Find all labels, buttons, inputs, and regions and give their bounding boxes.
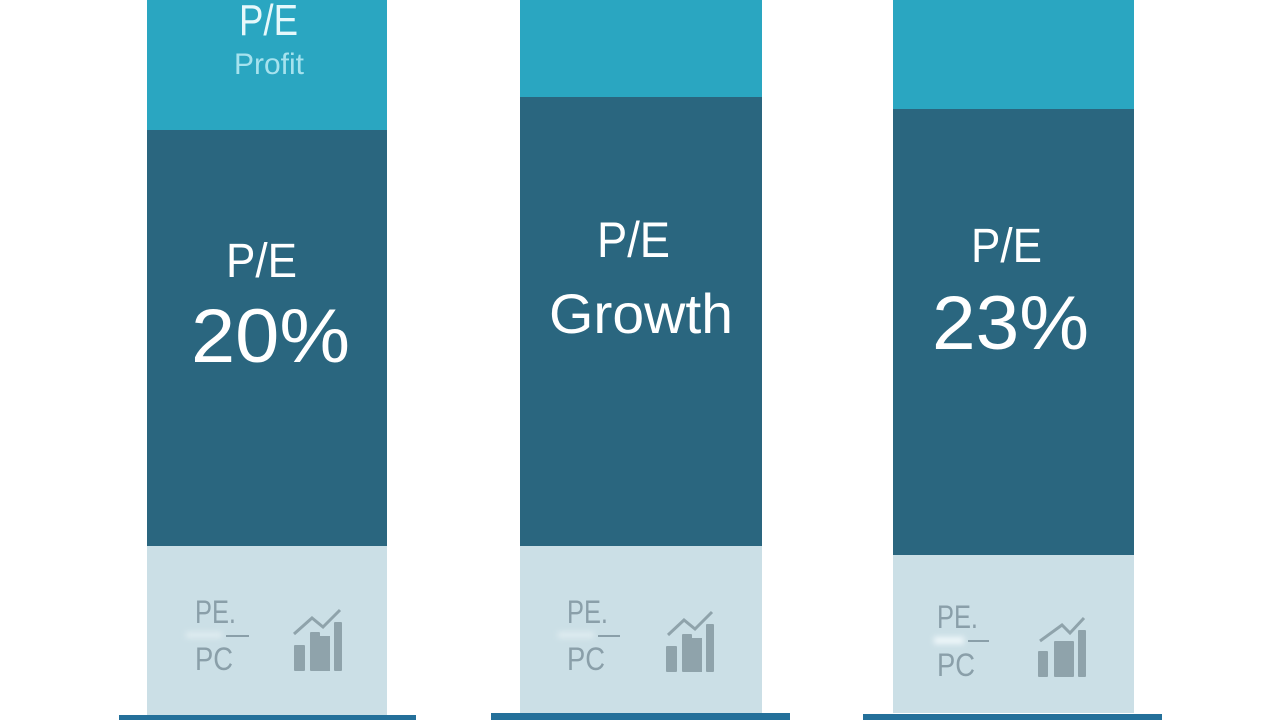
column 2 middle segment	[520, 97, 762, 546]
column 1 formula: PE over PC	[186, 594, 249, 677]
column 3 top segment	[893, 0, 1134, 109]
column 2 formula: PE over PC: PC	[567, 641, 605, 677]
column 2 formula: PE over PC	[558, 594, 620, 677]
icon: column 2 bar chart with trend line	[666, 612, 714, 672]
column 2 middle label: P/E: P/E	[597, 212, 670, 268]
column 1 value: 20%: 20%	[191, 294, 350, 379]
column 1: profit 20%	[119, 0, 416, 720]
column 3 middle label: P/E: P/E	[971, 220, 1042, 273]
column 2: growth	[491, 0, 790, 720]
column 3: 23%	[863, 0, 1162, 720]
column 1 top segment	[147, 0, 387, 130]
column 1 formula: PE over PC: PC	[195, 641, 233, 677]
column 3 formula: PE over PC: PC	[937, 647, 975, 683]
column 1 top label: Profit: Profit	[234, 48, 305, 81]
icon: column 1 bar chart with trend line	[294, 610, 342, 671]
column 2 base	[491, 713, 790, 720]
column 2 bottom segment	[520, 546, 762, 714]
column 3 value: 23%: 23%	[932, 281, 1089, 366]
column 3 middle segment	[893, 109, 1134, 555]
column 1 middle segment	[147, 130, 387, 546]
column 1 base	[119, 715, 416, 720]
column 1 formula: PE over PC: PE.	[195, 594, 236, 630]
column 3 bottom segment	[893, 555, 1134, 713]
column 2 label: Growth: Growth	[549, 282, 733, 345]
icon: column 3 bar chart with trend line	[1038, 618, 1086, 677]
column 2 formula: PE over PC: PE.	[567, 594, 608, 630]
column 3 formula: PE over PC	[934, 599, 989, 683]
column 1 middle label: P/E: P/E	[226, 235, 297, 288]
column 3 formula: PE over PC: PE.	[937, 599, 978, 635]
column 1 bottom segment	[147, 546, 387, 715]
column 3 base	[863, 714, 1162, 720]
column 2 top segment	[520, 0, 762, 97]
